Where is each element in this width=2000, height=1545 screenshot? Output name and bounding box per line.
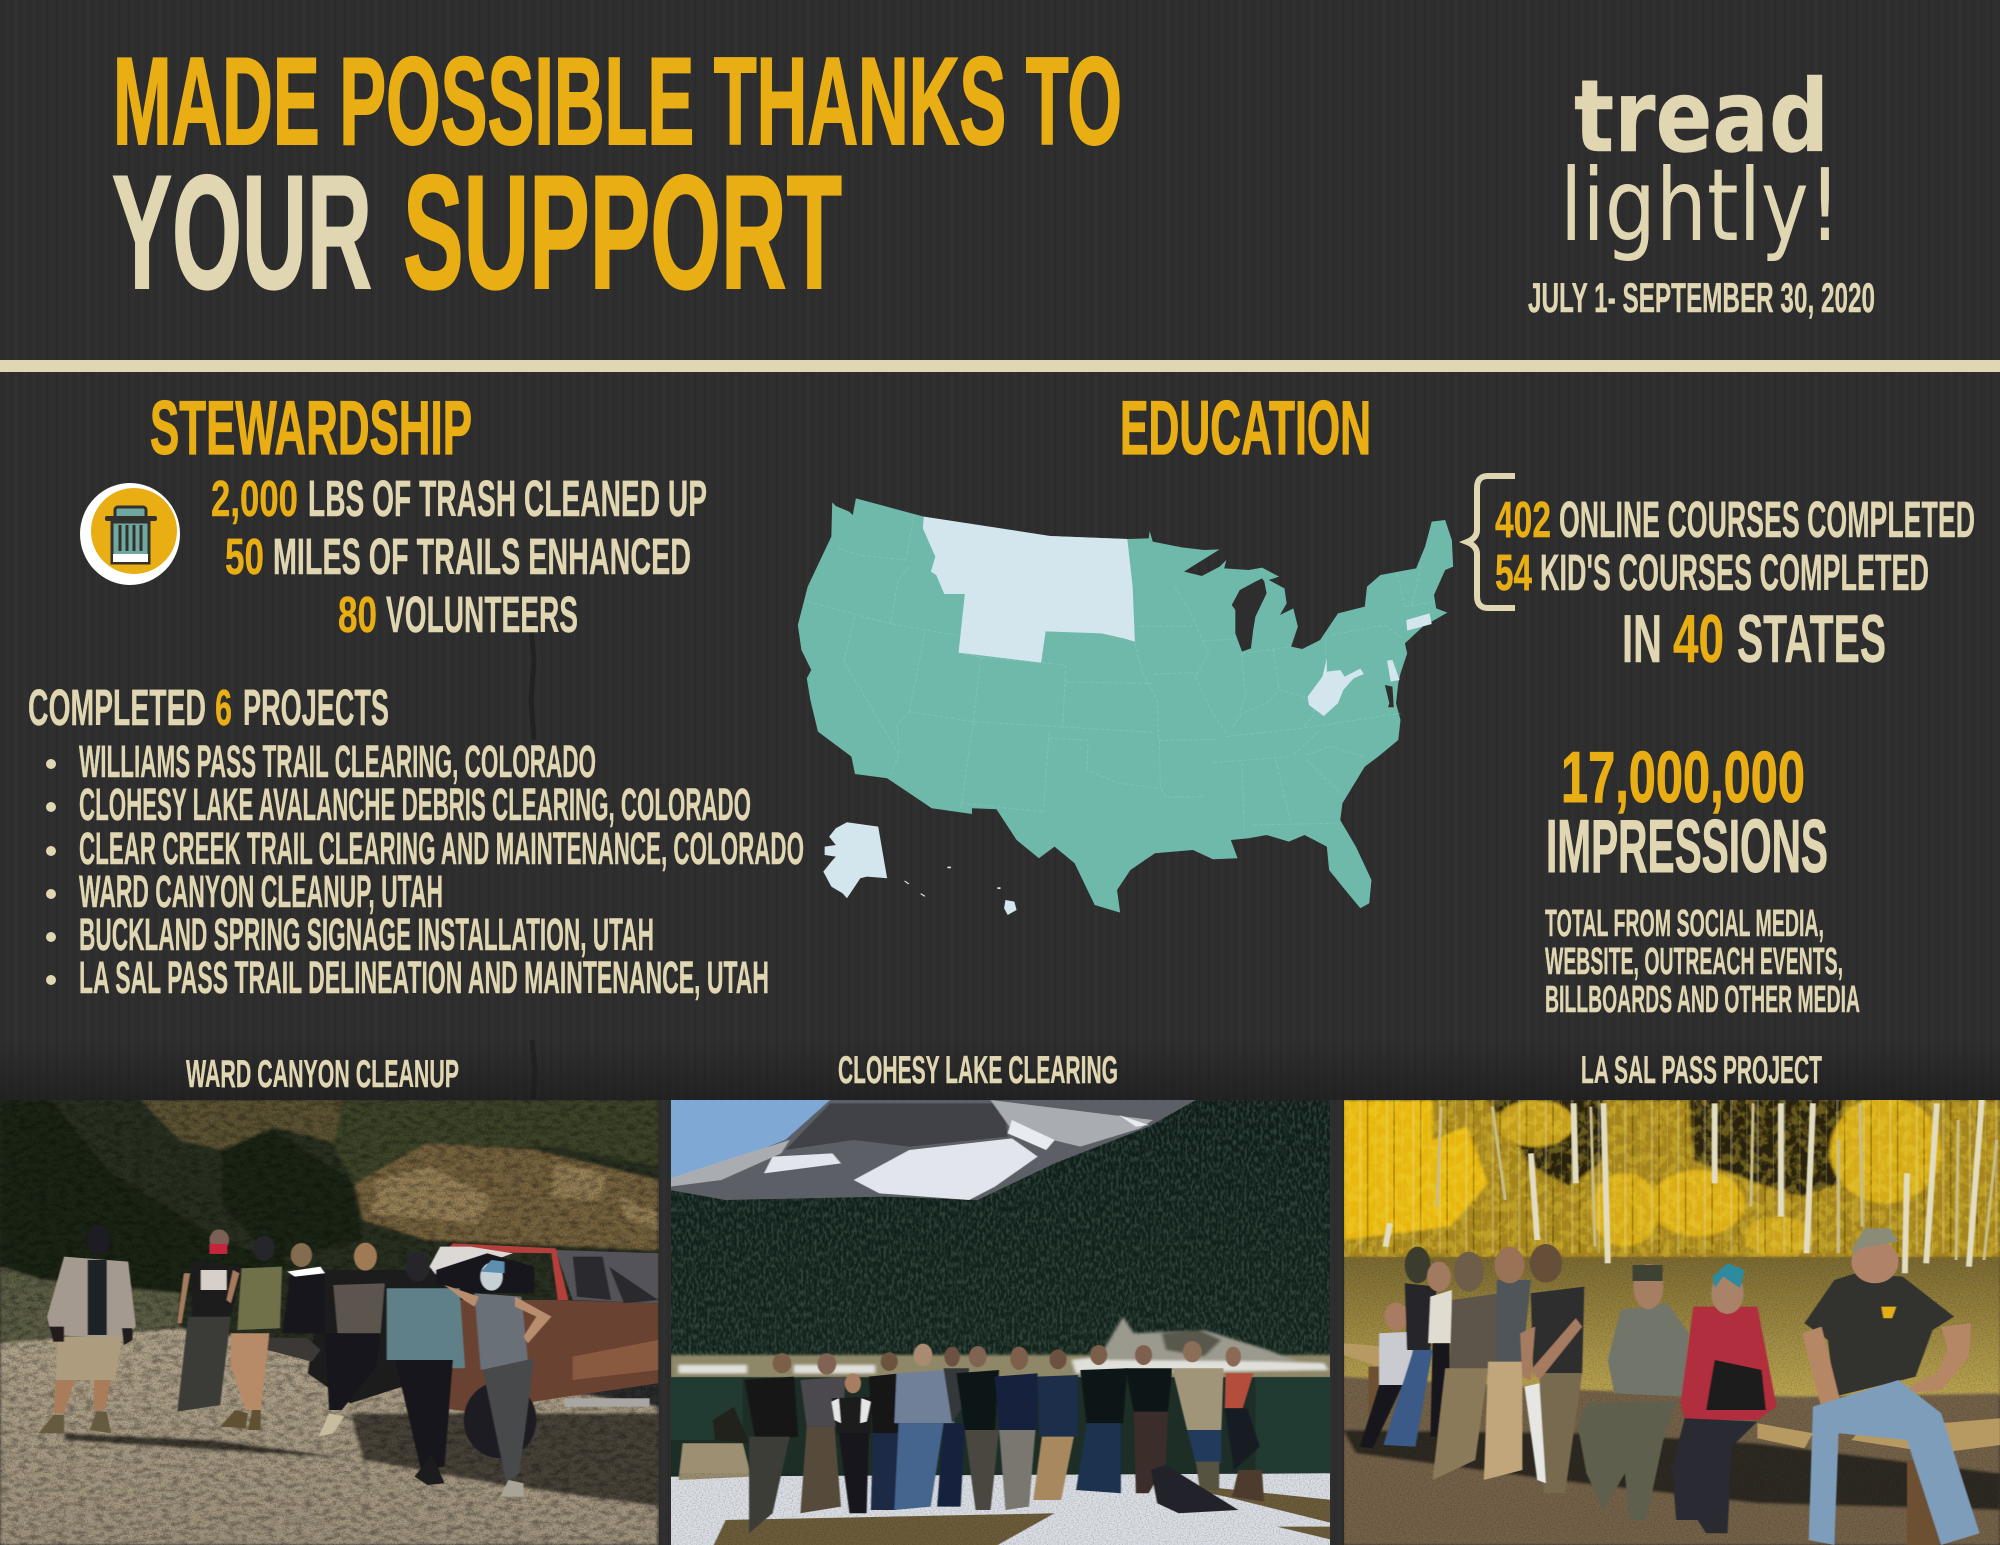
log fence	[1344, 1343, 2000, 1453]
project list: WARD CANYON CLEANUP, UTAH	[79, 866, 443, 917]
education stats: 402	[1495, 491, 1551, 548]
state borders	[808, 515, 1434, 833]
photo: clohesy lake group with mountain	[670, 1100, 1332, 1545]
caption: ward canyon: WARD CANYON CLEANUP	[186, 1053, 459, 1096]
impressions note	[1545, 903, 1860, 1021]
stewardship stats: 2,000	[211, 470, 298, 527]
title: MADE POSSIBLE THANKS TO	[113, 33, 1122, 171]
stewardship stats: 50	[225, 528, 264, 585]
man sitting right	[1804, 1273, 1954, 1397]
logo: tread lightly	[1560, 58, 1841, 264]
woman in plaid	[1680, 1307, 1777, 1420]
project list: BUCKLAND SPRING SIGNAGE INSTALLATION, UTAH	[79, 909, 654, 960]
education stats	[1495, 491, 1975, 677]
stewardship stats: 80	[338, 586, 377, 643]
stewardship stats: LBS OF TRASH CLEANED UP	[308, 470, 707, 527]
person 5	[333, 1283, 385, 1335]
education stats: STATES	[1737, 601, 1886, 677]
group of people	[745, 1377, 798, 1440]
stewardship stats: MILES OF TRAILS ENHANCED	[273, 528, 691, 585]
education stats: 54	[1495, 544, 1532, 601]
project list: WILLIAMS PASS TRAIL CLEARING, COLORADO	[79, 736, 596, 787]
logo: tread lightly: tread	[1574, 58, 1829, 175]
shoreline	[670, 1317, 1332, 1378]
title: SUPPORT	[403, 142, 842, 323]
person 7	[474, 1293, 528, 1370]
truck	[308, 1270, 444, 1403]
map of states reached	[798, 498, 1453, 915]
heading: stewardship: STEWARDSHIP	[150, 386, 472, 471]
logo: tread lightly: lightly!	[1560, 147, 1841, 264]
education stats: 40	[1673, 601, 1724, 677]
impressions stat: 17,000,000	[1561, 738, 1805, 818]
stewardship stats: VOLUNTEERS	[386, 586, 578, 643]
divider	[0, 360, 2000, 372]
people left group	[1379, 1332, 1415, 1385]
person 6	[387, 1288, 465, 1368]
completed projects heading: PROJECTS	[243, 679, 389, 736]
person 4	[282, 1273, 325, 1333]
project list: CLOHESY LAKE AVALANCHE DEBRIS CLEARING, COLORADO	[79, 779, 751, 830]
project list	[46, 736, 804, 1003]
photo: ward canyon cleanup crew with truck	[0, 1100, 658, 1545]
project list: LA SAL PASS TRAIL DELINEATION AND MAINTENANCE, UTAH	[79, 952, 769, 1003]
non-reached states	[923, 517, 1135, 663]
person 3	[237, 1267, 282, 1330]
impressions stat	[1546, 738, 1828, 888]
bracket	[1467, 476, 1515, 608]
man in grey	[1608, 1303, 1689, 1397]
person 1	[47, 1257, 136, 1338]
caption: clohesy lake: CLOHESY LAKE CLEARING	[838, 1049, 1118, 1092]
person 2	[190, 1260, 241, 1318]
completed projects heading: COMPLETED	[28, 679, 206, 736]
education stats: IN	[1622, 601, 1662, 677]
title: YOUR	[112, 142, 372, 323]
text: CLEAR CREEK TRAIL CLEARING AND MAINTENANCE, COLORADO	[79, 823, 804, 874]
stewardship stats	[211, 470, 707, 643]
title	[112, 33, 1122, 323]
photo: la sal pass group in aspens	[1343, 1097, 2000, 1545]
heading: education: EDUCATION	[1120, 386, 1371, 471]
completed projects heading: 6	[215, 679, 232, 736]
aspen trunks	[1386, 1100, 1982, 1273]
icon: trash can	[80, 483, 180, 585]
great lakes and bays	[1232, 578, 1394, 707]
